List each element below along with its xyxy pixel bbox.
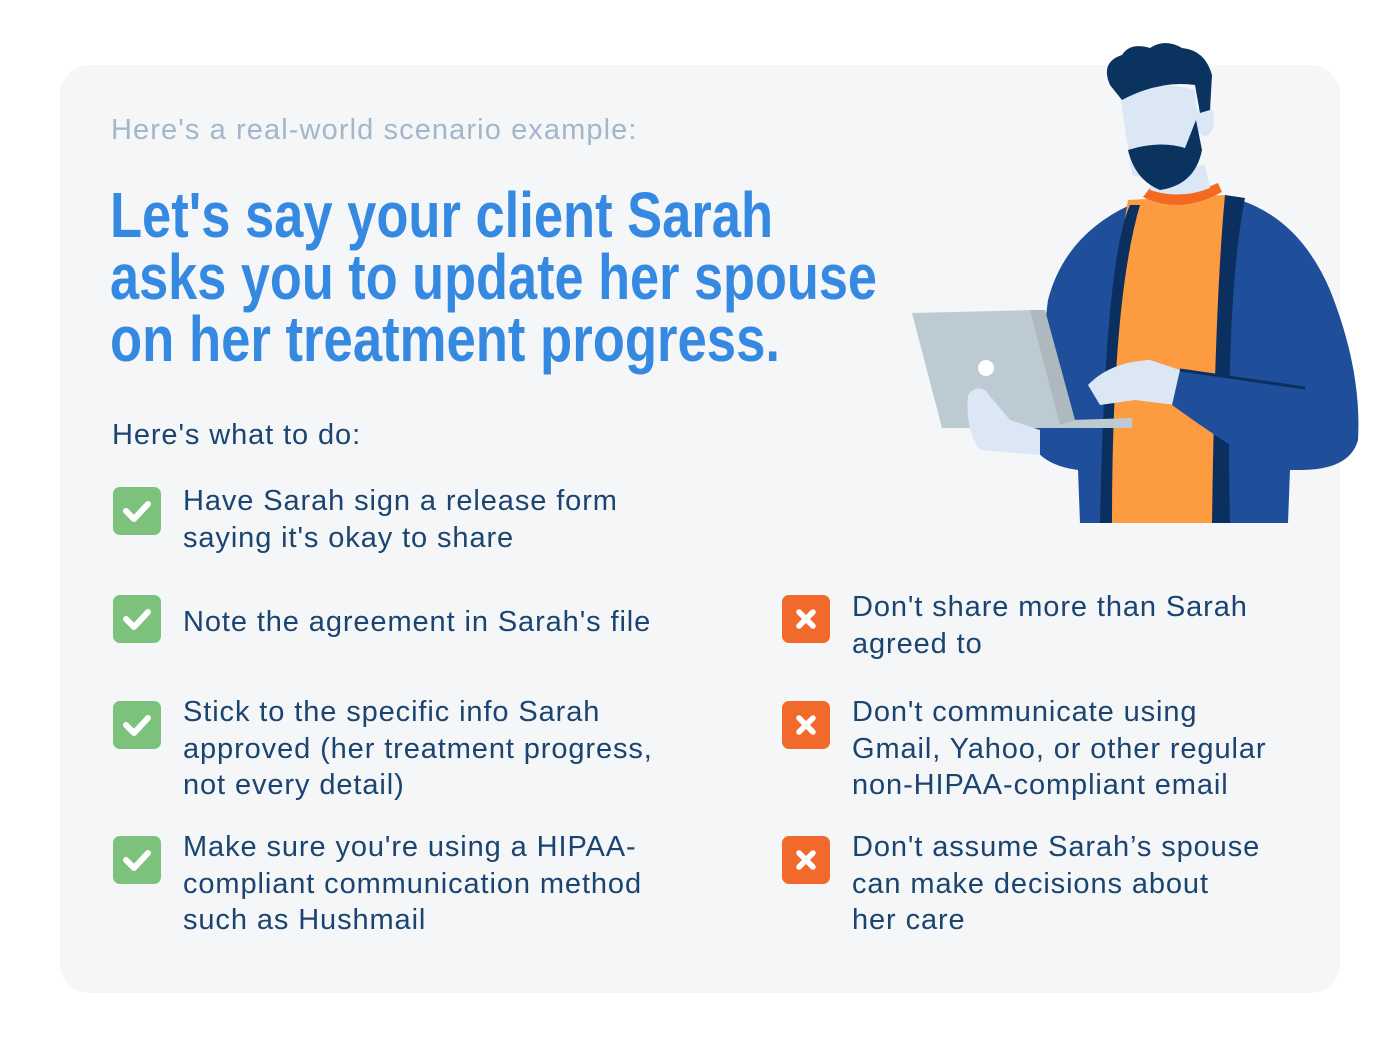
- text: Don't communicate using: [852, 696, 1197, 728]
- neck: [1150, 165, 1210, 195]
- orange shirt: [1110, 195, 1225, 523]
- do item 1: [113, 485, 618, 554]
- sleeve: [1172, 370, 1330, 470]
- title: Let's say your client Sarah: [110, 179, 773, 251]
- collar: [1143, 183, 1222, 205]
- text: Don't share more than Sarah: [852, 591, 1248, 623]
- subheading: Here's a real-world scenario example:: [111, 114, 638, 146]
- text: not every detail): [183, 769, 405, 801]
- dont item 1: [782, 591, 1248, 660]
- dont item 2: [782, 696, 1266, 801]
- do item 3: [113, 696, 653, 801]
- text: non-HIPAA-compliant email: [852, 769, 1229, 801]
- text: compliant communication method: [183, 868, 642, 900]
- laptop: [912, 310, 1132, 428]
- face: [1120, 85, 1200, 185]
- text: her care: [852, 904, 966, 936]
- text: can make decisions about: [852, 868, 1209, 900]
- text: Gmail, Yahoo, or other regular: [852, 732, 1266, 764]
- title: [110, 179, 877, 375]
- text: saying it's okay to share: [183, 522, 514, 554]
- hands: [968, 388, 1040, 455]
- title: on her treatment progress.: [110, 303, 780, 375]
- heading: what to do: Here's what to do:: [112, 419, 361, 451]
- do item 4: [113, 831, 642, 936]
- beard: [1128, 120, 1202, 190]
- dont item 3: [782, 831, 1260, 936]
- text: Make sure you're using a HIPAA-: [183, 831, 637, 863]
- text: agreed to: [852, 628, 983, 660]
- text: approved (her treatment progress,: [183, 732, 653, 764]
- do item 2: [113, 595, 651, 643]
- text: Have Sarah sign a release form: [183, 485, 618, 517]
- jacket body: [1030, 200, 1358, 523]
- text: Stick to the specific info Sarah: [183, 696, 600, 728]
- text: Note the agreement in Sarah's file: [183, 606, 651, 638]
- text: Don't assume Sarah’s spouse: [852, 831, 1260, 863]
- text: such as Hushmail: [183, 904, 426, 936]
- hair: [1107, 43, 1212, 113]
- jacket lapels: [1100, 205, 1140, 523]
